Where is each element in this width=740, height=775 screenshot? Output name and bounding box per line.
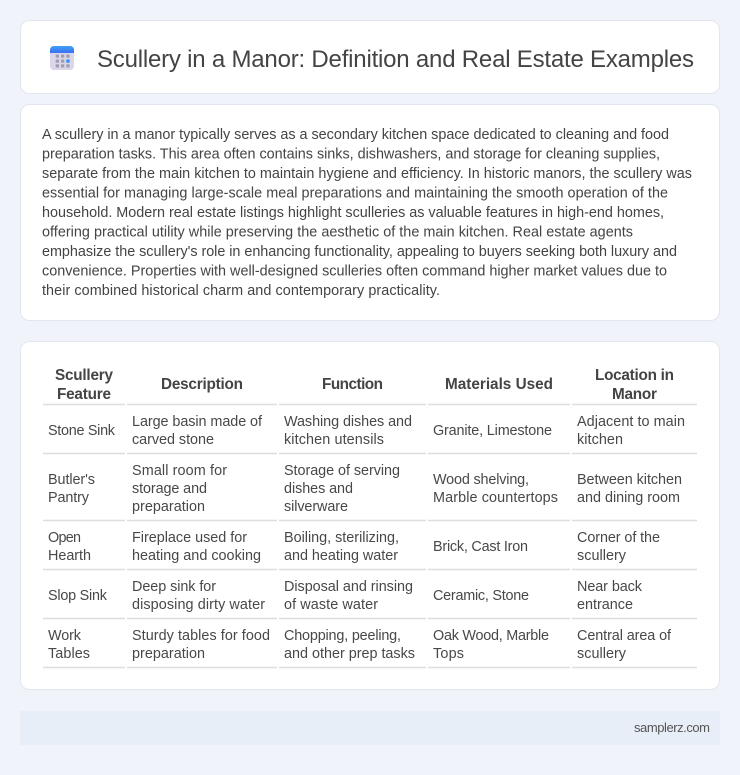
table row: Open Hearth: Hearth <box>48 548 91 564</box>
table row: Slop Sink: Deep sink for <box>132 579 216 595</box>
table row: Butler's Pantry: Between kitchen <box>577 472 682 488</box>
table header row: Feature <box>57 386 111 403</box>
text block: description paragraph: emphasize the scullery's role in enhancing functionality, appealing to buyers seeking both luxury and <box>42 244 677 260</box>
table row: Open Hearth: and heating water <box>284 548 398 564</box>
table header row: Manor <box>612 386 657 403</box>
table row: Work Tables: Tables <box>48 646 90 662</box>
table row: Work Tables: preparation <box>132 646 205 662</box>
table row: Stone Sink: Adjacent to main <box>577 414 685 430</box>
table header row: Materials Used <box>445 376 553 393</box>
text block: description paragraph: essential for managing large-scale meal preparations and maintaining the smooth operation of the <box>42 186 668 202</box>
table row: Slop Sink: disposing dirty water <box>132 597 265 613</box>
table row: Butler's Pantry: Marble countertops <box>433 490 558 506</box>
table header row: Location in <box>595 367 674 384</box>
table row: Open Hearth: Brick, Cast Iron <box>433 539 528 555</box>
table row: Work Tables: Work <box>48 628 82 644</box>
table row: Butler's Pantry: storage and <box>132 481 207 497</box>
table row: Work Tables: scullery <box>577 646 627 662</box>
table row: Butler's Pantry: dishes and <box>284 481 353 497</box>
text block: description paragraph <box>42 127 692 299</box>
table row: Stone Sink: Granite, Limestone <box>433 423 552 439</box>
text block: description paragraph: separate from the main kitchen to maintain hygiene and efficiency. In historic manors, the scullery was <box>42 166 692 182</box>
table row: Slop Sink <box>48 579 643 613</box>
text block: description paragraph: offering practical utility while preserving the aesthetic of the main kitchen. Real estate agents <box>42 224 633 240</box>
table header row: Function <box>322 376 383 393</box>
table row: Open Hearth: Boiling, sterilizing, <box>284 530 399 546</box>
table row: Slop Sink: entrance <box>577 597 633 613</box>
icon: calendar <box>50 46 74 70</box>
table row: Stone Sink <box>48 414 685 448</box>
table header row: Scullery <box>55 367 113 384</box>
table row: Slop Sink: Disposal and rinsing <box>284 579 413 595</box>
table row: Slop Sink: of waste water <box>284 597 378 613</box>
table row: Stone Sink: Large basin made of <box>132 414 263 430</box>
table row: Work Tables: Sturdy tables for food <box>132 628 270 644</box>
table row: Work Tables: and other prep tasks <box>284 646 415 662</box>
footer <box>20 711 720 745</box>
table header row: Description <box>161 376 243 393</box>
table row: Butler's Pantry: silverware <box>284 499 348 515</box>
table row: Stone Sink: carved stone <box>132 432 214 448</box>
table row: Stone Sink: kitchen <box>577 432 623 448</box>
text block: description paragraph: convenience. Properties with well-designed sculleries often command higher market values due to <box>42 264 667 280</box>
table row: Butler's Pantry: Pantry <box>48 490 90 506</box>
table row: Work Tables <box>48 628 672 662</box>
text block: description paragraph: preparation tasks. This area often contains sinks, dishwashers, and storage for cleaning supplies, <box>42 146 660 162</box>
table row: Open Hearth: Open <box>48 530 81 546</box>
table row: Open Hearth: Corner of the <box>577 530 660 546</box>
table row: Stone Sink: Stone Sink <box>48 423 116 439</box>
table row: Stone Sink: Washing dishes and <box>284 414 412 430</box>
table row: Butler's Pantry: and dining room <box>577 490 680 506</box>
table row: Slop Sink: Ceramic, Stone <box>433 588 529 604</box>
table header row <box>55 367 674 403</box>
table row: Butler's Pantry: Small room for <box>132 463 227 479</box>
text block: description paragraph: household. Modern real estate listings highlight sculleries as valuable features in high-end homes, <box>42 205 664 221</box>
table row: Open Hearth: heating and cooking <box>132 548 261 564</box>
title: Scullery in a Manor: Definition and Real Estate Examples <box>97 46 694 73</box>
table row: Work Tables: Tops <box>433 646 464 662</box>
table row: Open Hearth: Fireplace used for <box>132 530 247 546</box>
table row: Butler's Pantry: preparation <box>132 499 205 515</box>
table row: Butler's Pantry: Storage of serving <box>284 463 400 479</box>
table row: Butler's Pantry: Butler's <box>48 472 95 488</box>
panel: description <box>20 104 720 320</box>
table row: Slop Sink: Near back <box>577 579 643 595</box>
text block: description paragraph: A scullery in a manor typically serves as a secondary kitchen space dedicated to cleaning and food <box>42 127 669 143</box>
table row: Butler's Pantry: Wood shelving, <box>433 472 529 488</box>
table row: Open Hearth: scullery <box>577 548 627 564</box>
table row: Butler's Pantry <box>48 463 682 515</box>
table row: Work Tables: Central area of <box>577 628 672 644</box>
table row: Work Tables: Chopping, peeling, <box>284 628 401 644</box>
footer: samplerz.com <box>634 720 710 735</box>
table row: Open Hearth <box>48 530 660 564</box>
panel: title card <box>20 20 720 94</box>
text block: description paragraph: their combined historical charm and contemporary practicality. <box>42 283 440 299</box>
table row: Work Tables: Oak Wood, Marble <box>433 628 549 644</box>
table row: Stone Sink: kitchen utensils <box>284 432 384 448</box>
table row: Slop Sink: Slop Sink <box>48 588 108 604</box>
panel: scullery features table <box>20 342 720 690</box>
